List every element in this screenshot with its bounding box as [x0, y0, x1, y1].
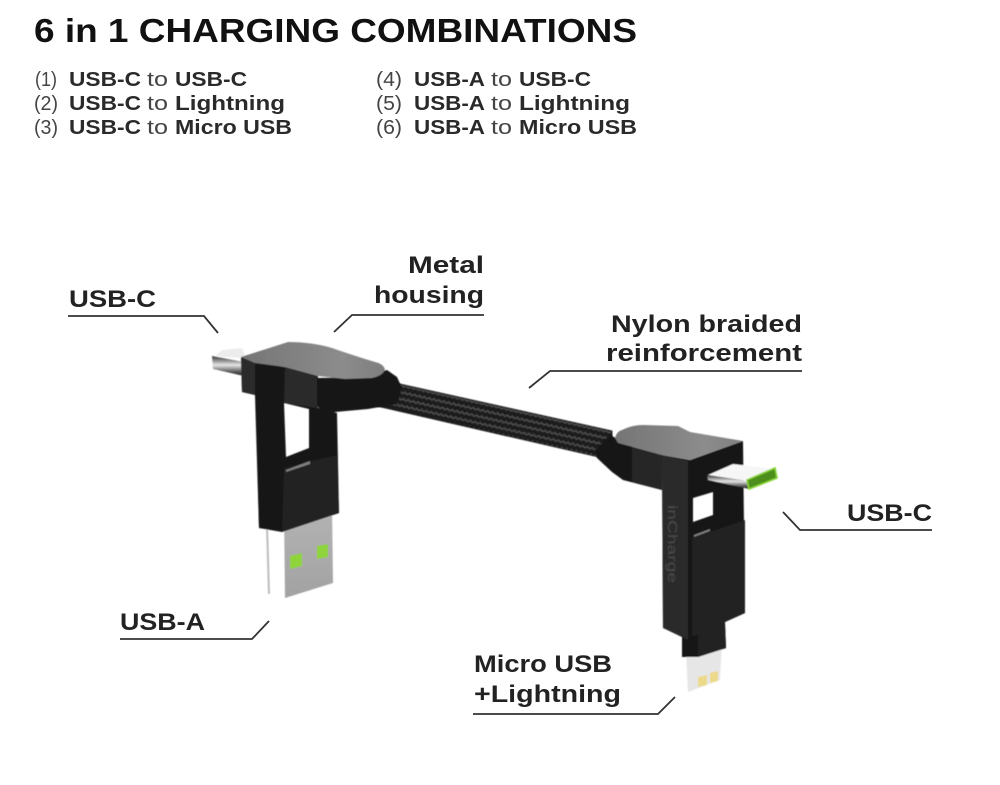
right adapter body [662, 441, 745, 657]
USB-A plug [266, 505, 333, 598]
list: USB-C combinations: to [147, 69, 168, 91]
list: USB-A combinations: USB-A [414, 93, 485, 115]
list: USB-A combinations: USB-A [414, 117, 485, 139]
left strain relief [317, 370, 402, 415]
USB-C plug, right [707, 464, 777, 489]
label: Nylon braided reinforcement: reinforcement [606, 340, 802, 367]
list: USB-C combinations: to [147, 117, 168, 139]
label: Micro USB + Lightning [473, 651, 675, 714]
label: Micro USB + Lightning: Micro USB [474, 651, 612, 678]
list: USB-C combinations: (2) [34, 93, 58, 115]
left adapter body [241, 357, 339, 532]
label: USB-C right [783, 500, 932, 530]
list: USB-C combinations: USB-C [69, 93, 141, 115]
list: USB-A combinations: USB-C [519, 69, 591, 91]
list: USB-C combinations: USB-C [69, 69, 141, 91]
list: USB-C combinations: Micro USB [175, 117, 292, 139]
label: Metal housing [334, 252, 484, 332]
brand mark on side: inCharge [665, 505, 680, 583]
label: Metal housing: housing [374, 282, 484, 309]
list: USB-C combinations: to [147, 93, 168, 115]
list: USB-A combinations: to [491, 93, 512, 115]
list: USB-C combinations: (1) [35, 69, 57, 91]
list: USB-A combinations [376, 69, 637, 139]
left connector [212, 342, 402, 598]
right connector [595, 425, 777, 692]
braided cable [368, 377, 612, 460]
right metal housing [615, 425, 743, 460]
list: USB-A combinations: (4) [376, 69, 402, 91]
list: USB-A combinations: Micro USB [519, 117, 637, 139]
list: USB-C combinations [34, 69, 292, 139]
label: USB-A [120, 609, 269, 639]
label: USB-A: USB-A [120, 609, 205, 636]
label: Nylon braided reinforcement: Nylon braided [611, 311, 802, 338]
left metal housing [241, 342, 385, 379]
label: USB-C left: USB-C [69, 286, 156, 313]
label: USB-C right: USB-C [847, 500, 932, 527]
list: USB-C combinations: USB-C [69, 117, 141, 139]
Lightning plug [686, 642, 722, 692]
label: Micro USB + Lightning: +Lightning [474, 681, 621, 708]
list: USB-A combinations: Lightning [519, 93, 630, 115]
label: Nylon braided reinforcement [529, 311, 802, 388]
list: USB-C combinations: USB-C [175, 69, 247, 91]
list: USB-A combinations: USB-A [414, 69, 485, 91]
label: Metal housing: Metal [408, 252, 484, 279]
list: USB-A combinations: (6) [376, 117, 402, 139]
list: USB-C combinations: (3) [34, 117, 58, 139]
list: USB-A combinations: (5) [376, 93, 402, 115]
title: 6 in 1 CHARGING COMBINATIONS [34, 12, 637, 49]
USB-C plug, left [212, 348, 246, 376]
list: USB-A combinations: to [491, 69, 512, 91]
list: USB-C combinations: Lightning [175, 93, 285, 115]
label: USB-C left [68, 286, 218, 333]
list: USB-A combinations: to [491, 117, 512, 139]
right strain relief [595, 435, 662, 490]
